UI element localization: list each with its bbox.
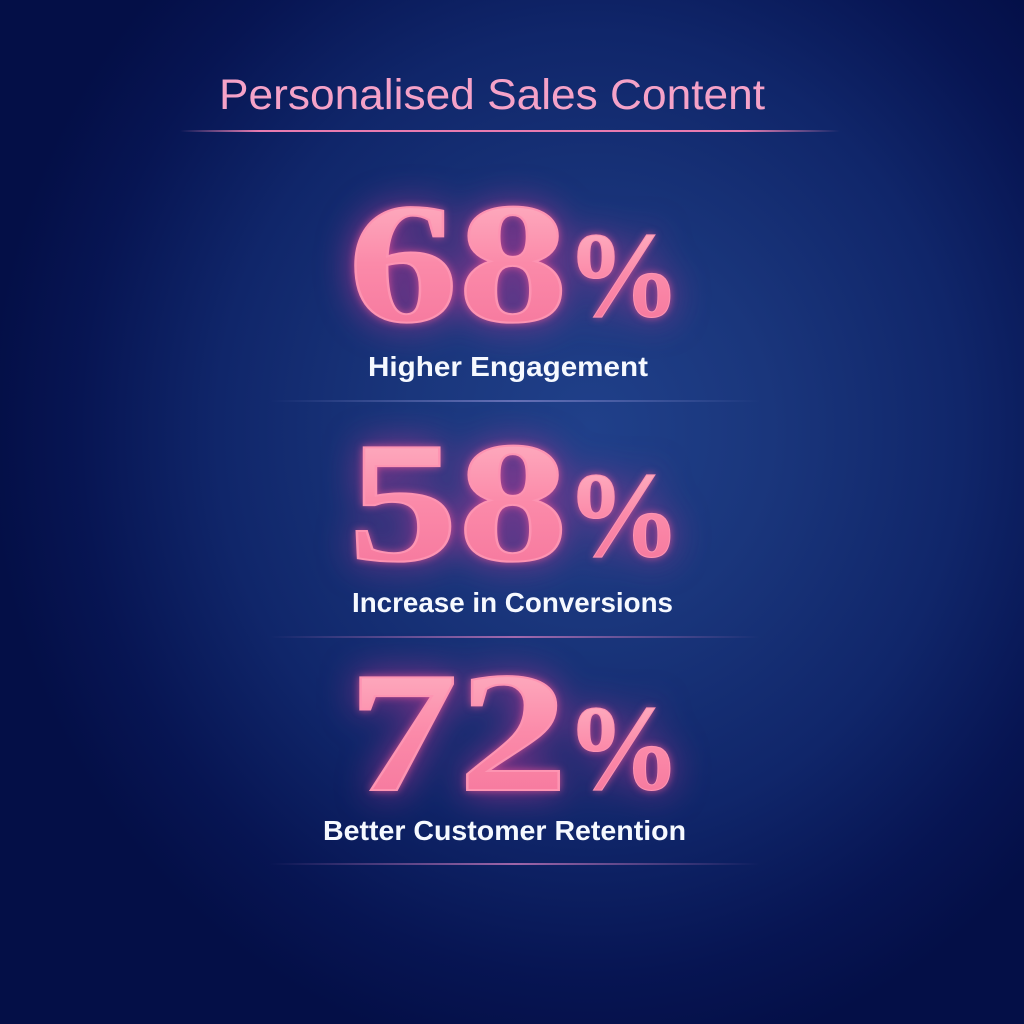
label: Increase in Conversions: Increase in Conversions bbox=[352, 587, 673, 618]
stat: 58%: 58 bbox=[348, 407, 568, 597]
stat: 72% bbox=[348, 637, 681, 827]
stat: 68%: % bbox=[566, 208, 681, 343]
title: Personalised Sales Content bbox=[219, 71, 765, 119]
stat: 68%: 68 bbox=[348, 168, 568, 358]
label: Higher Engagement: Higher Engagement bbox=[368, 351, 648, 382]
label: Better Customer Retention: Better Customer Retention bbox=[323, 815, 686, 846]
stat: 58% bbox=[348, 407, 681, 597]
stat: 72%: % bbox=[566, 681, 681, 816]
stat: 72%: 72 bbox=[348, 637, 568, 827]
stat: 58%: % bbox=[566, 448, 681, 583]
stat: 68% bbox=[348, 168, 681, 358]
